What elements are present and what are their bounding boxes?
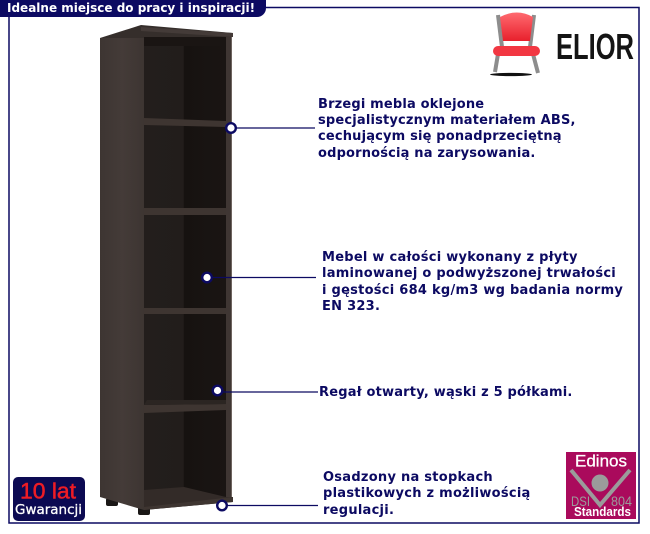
callout dots [202,123,236,510]
text: edges: odpornością na zarysowania. [318,146,536,161]
badge: 10 lat guarantee: Gwarancji [15,503,82,518]
text: feet [323,470,531,518]
right panel [226,37,232,498]
floor [144,487,233,510]
text: shelf type: Regał otwarty, wąski z 5 półkami. [319,384,573,400]
text: edges: cechującym się ponadprzeciętną [318,129,562,144]
text: material: EN 323. [322,299,380,314]
heading banner: Idealne miejsce do pracy i inspiracji! [7,1,255,15]
icon: chair logo [490,12,540,76]
text: material: laminowanej o podwyższonej trwałości [322,266,616,281]
text: edges: Brzegi mebla oklejone [318,96,484,112]
callout lines [207,128,318,506]
text: feet: Osadzony na stopkach [323,470,493,485]
badge: Edinos Standards: Edinos [575,452,627,470]
badge: 10 lat guarantee [13,477,85,521]
badge: Edinos Standards: 804 [611,493,632,509]
badge: Edinos Standards: Standards [574,505,631,519]
side panel [100,37,144,510]
text: edges: specjalistycznym materiałem ABS, [318,113,576,128]
text: material: Mebel w całości wykonany z płyty [322,250,578,265]
top panel [100,25,233,38]
text: feet: plastikowych z możliwością [323,486,531,501]
badge: Edinos Standards: DSI [571,493,590,509]
badge: Edinos Standards [566,452,636,519]
shelves [144,118,226,413]
text: edges [318,96,576,161]
feet [106,498,150,515]
badge: 10 lat guarantee: 10 lat [20,478,76,504]
bookshelf [100,25,233,515]
text: material [322,250,623,314]
interior [144,37,226,498]
text: material: i gęstości 684 kg/m3 wg badania normy [322,283,623,298]
text: feet: regulacji. [323,503,394,518]
